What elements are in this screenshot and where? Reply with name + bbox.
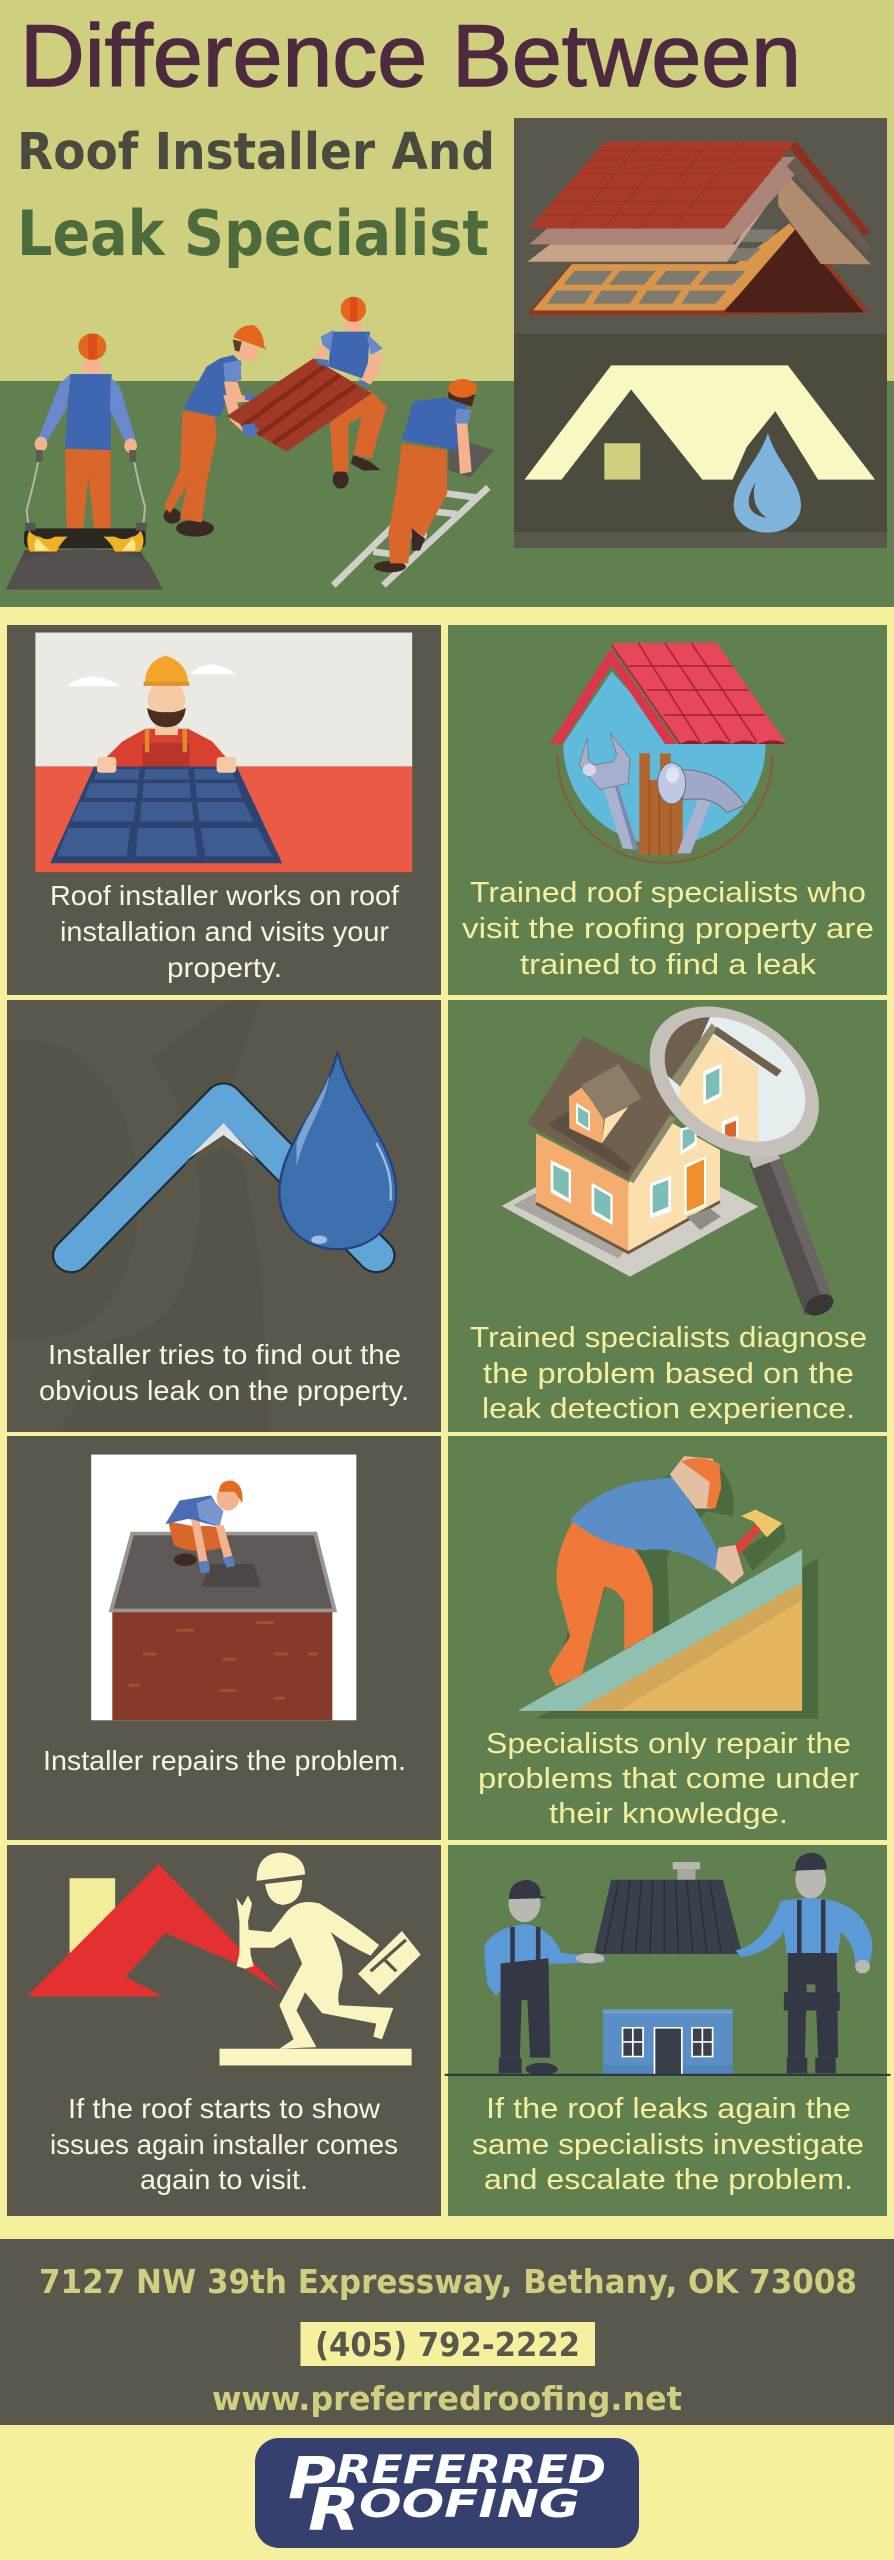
worker lifting sheet right	[315, 297, 387, 489]
text: roof installer works: Roof installer works on roof	[50, 880, 399, 911]
text: roof installer works	[50, 880, 399, 983]
icon: roofer hammering	[518, 1456, 818, 1719]
text: specialists diagnose: leak detection experience.	[482, 1393, 855, 1425]
ladder	[333, 487, 488, 585]
icon: worker running to damaged roof	[27, 1853, 421, 2065]
text: installer finds leak	[39, 1339, 409, 1406]
panel: installer returns	[7, 1845, 441, 2216]
image: installer with solar panel	[35, 633, 412, 872]
text: roof installer works: property.	[167, 952, 282, 983]
icon: two specialists lifting roof	[445, 1853, 890, 2076]
icon: house with tools	[550, 643, 787, 863]
icon: house with leak drop	[524, 365, 875, 533]
title: difference between: Difference Between	[20, 6, 801, 105]
header image panel	[514, 118, 887, 548]
illustration: roofing workers	[6, 297, 494, 589]
text: installer finds leak: obvious leak on the property.	[39, 1375, 409, 1406]
icon: roof layers	[527, 141, 871, 316]
text: trained roof specialists: trained to find a leak	[520, 949, 817, 981]
icon: water drop	[279, 1051, 396, 1249]
text: roof installer works: installation and visits your	[60, 916, 389, 947]
website: www.preferredroofing.net	[212, 2379, 682, 2418]
text: installer repairs: Installer repairs the problem.	[43, 1745, 406, 1776]
text: trained roof specialists: visit the roofing property are	[462, 913, 874, 945]
text: specialists diagnose	[470, 1322, 867, 1425]
panel: roof installer works	[7, 625, 441, 995]
text: installer returns: again to visit.	[140, 2164, 308, 2195]
roof sheet	[227, 358, 372, 452]
panel: specialists investigate	[445, 1845, 890, 2216]
text: specialists investigate: If the roof leaks again the	[486, 2093, 851, 2125]
text: specialists investigate: same specialists investigate	[472, 2129, 864, 2161]
text: specialists repair	[478, 1728, 859, 1830]
panel: specialists repair	[448, 1436, 887, 1840]
text: specialists diagnose: Trained specialists diagnose	[470, 1322, 867, 1354]
text: installer returns: issues again installer comes	[50, 2129, 398, 2160]
phone box: (405) 792-2222	[315, 2325, 580, 2364]
panel: trained roof specialists	[448, 625, 887, 995]
logo: preferred roofing: REFERRED	[336, 2448, 606, 2493]
logo: preferred roofing	[255, 2438, 639, 2548]
logo: preferred roofing: P	[288, 2444, 336, 2512]
panel: specialists diagnose	[448, 975, 887, 1432]
icon: leaking roof chevron	[71, 1051, 396, 1255]
text: specialists repair: Specialists only repair the	[486, 1728, 851, 1760]
specialist right	[735, 1853, 872, 2073]
header panel	[0, 0, 894, 607]
address: 7127 NW 39th Expressway, Bethany, OK 73008	[39, 2262, 857, 2301]
text: specialists repair: problems that come under	[478, 1763, 859, 1795]
specialist left	[485, 1880, 604, 2075]
worker with torch roll	[6, 333, 163, 589]
logo: preferred roofing: OOFING	[359, 2482, 580, 2526]
text: specialists investigate: and escalate the problem.	[484, 2164, 853, 2196]
text: specialists repair: their knowledge.	[549, 1798, 788, 1830]
heading: leak specialist: Leak Specialist	[17, 197, 489, 270]
text: installer finds leak: Installer tries to find out the	[48, 1339, 401, 1370]
heading: roof installer and: Roof Installer And	[17, 123, 495, 182]
text: trained roof specialists: Trained roof specialists who	[470, 877, 866, 909]
panel: installer finds leak	[7, 1000, 441, 1432]
text: installer returns: If the roof starts to show	[68, 2093, 381, 2124]
worker lifting sheet left	[164, 325, 267, 537]
text: specialists investigate	[472, 2093, 864, 2196]
text: trained roof specialists	[462, 877, 874, 981]
logo: preferred roofing: R	[308, 2475, 360, 2544]
text: installer returns	[50, 2093, 398, 2195]
panel: installer repairs	[7, 1436, 441, 1840]
icon: house under magnifying glass	[502, 1006, 834, 1316]
worker on ladder	[374, 379, 494, 572]
panel: footer contact	[0, 2239, 894, 2425]
image: installer repairing flat roof	[91, 1455, 356, 1720]
text: specialists diagnose: the problem based on the	[483, 1358, 854, 1390]
